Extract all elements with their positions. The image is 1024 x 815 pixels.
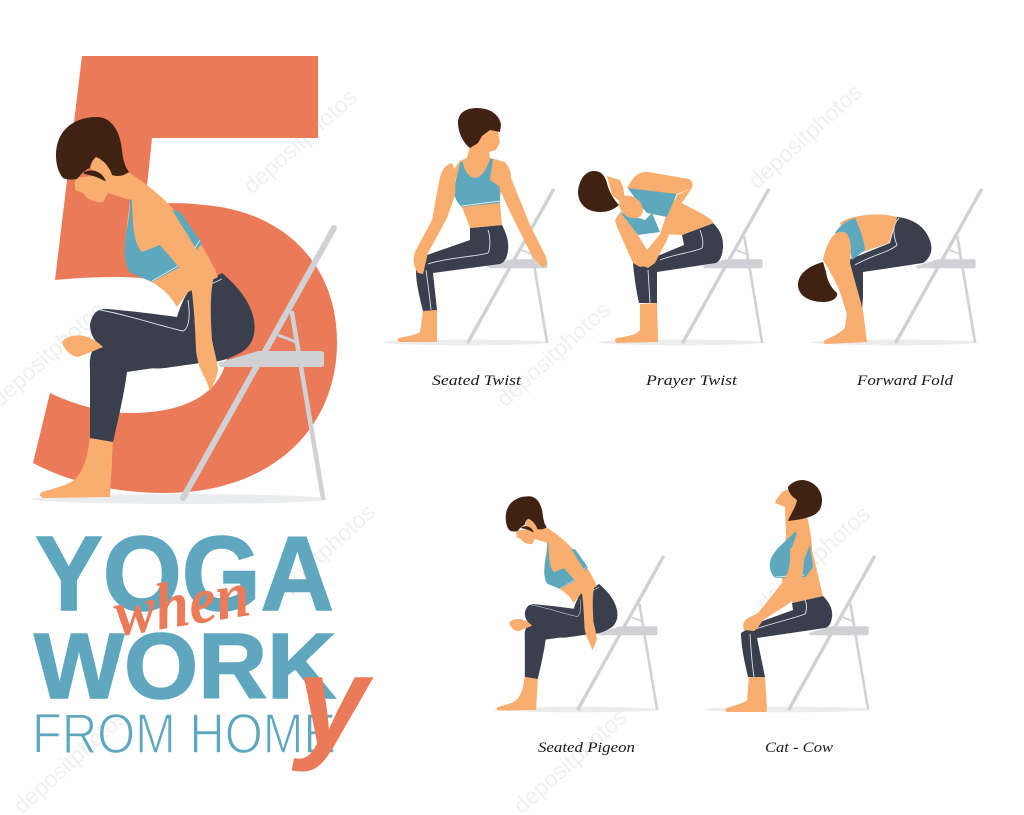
watermark: depositphotos <box>743 79 867 194</box>
chair <box>704 557 874 712</box>
figure: main seated pigeon <box>40 117 255 498</box>
woman <box>798 215 931 344</box>
chair <box>811 190 981 345</box>
watermark <box>0 79 875 815</box>
pose: seated twist <box>383 108 553 345</box>
woman <box>398 108 547 342</box>
woman <box>497 496 617 711</box>
chair <box>493 557 663 712</box>
pose: seated pigeon <box>493 496 663 712</box>
watermark: depositphotos <box>238 84 362 199</box>
pose: cat cow <box>704 480 874 712</box>
title: when: when <box>109 557 255 651</box>
label: cat cow: Cat - Cow <box>765 740 833 756</box>
pose: prayer twist <box>578 171 768 345</box>
title: FROM HOME: FROM HOME <box>32 702 336 766</box>
label: prayer twist: Prayer Twist <box>645 373 738 389</box>
chair: main figure <box>32 228 334 504</box>
watermark: depositphotos <box>751 501 875 616</box>
chair <box>383 190 553 345</box>
title: YOGA: YOGA <box>35 515 334 633</box>
label: forward fold: Forward Fold <box>856 373 954 389</box>
label: seated pigeon: Seated Pigeon <box>538 740 635 756</box>
woman <box>578 171 723 343</box>
pose: forward fold <box>798 190 981 345</box>
watermark: depositphotos <box>491 297 615 412</box>
chair <box>598 190 768 345</box>
woman <box>725 480 832 712</box>
title: WORK: WORK <box>34 614 336 718</box>
watermark: depositphotos <box>256 499 380 614</box>
big number 5 <box>33 56 337 493</box>
title: y: y <box>291 630 374 773</box>
label: seated twist: Seated Twist <box>432 373 522 389</box>
